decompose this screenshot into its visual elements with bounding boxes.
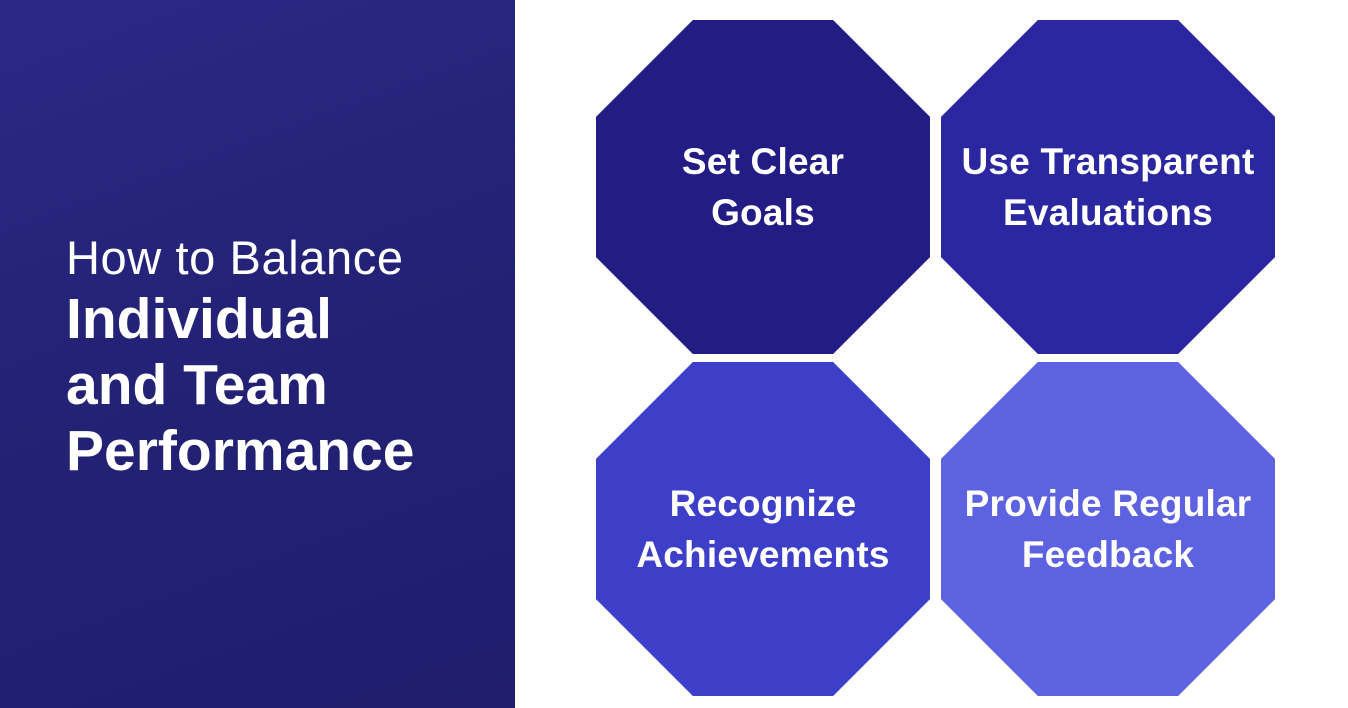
octagon: use transparent evaluations: Use Transparent (962, 141, 1254, 182)
title: How to Balance (66, 231, 404, 284)
octagon: set clear goals: Set Clear (682, 141, 844, 182)
octagon: use transparent evaluations (941, 20, 1275, 354)
panel: left title background (0, 0, 515, 708)
octagon: recognize achievements: Recognize (670, 483, 856, 524)
title: Individual (66, 287, 332, 351)
octagon: provide regular feedback: Provide Regular (965, 483, 1251, 524)
octagon: recognize achievements: Achievements (636, 534, 890, 575)
octagon: set clear goals: Goals (711, 192, 815, 233)
octagon: set clear goals (596, 20, 930, 354)
title: and Team (66, 353, 328, 417)
octagon: recognize achievements (596, 362, 930, 696)
octagon: provide regular feedback: Feedback (1022, 534, 1194, 575)
octagon: use transparent evaluations: Evaluations (1003, 192, 1213, 233)
title (66, 231, 414, 483)
title: Performance (66, 419, 414, 483)
octagon: provide regular feedback (941, 362, 1275, 696)
